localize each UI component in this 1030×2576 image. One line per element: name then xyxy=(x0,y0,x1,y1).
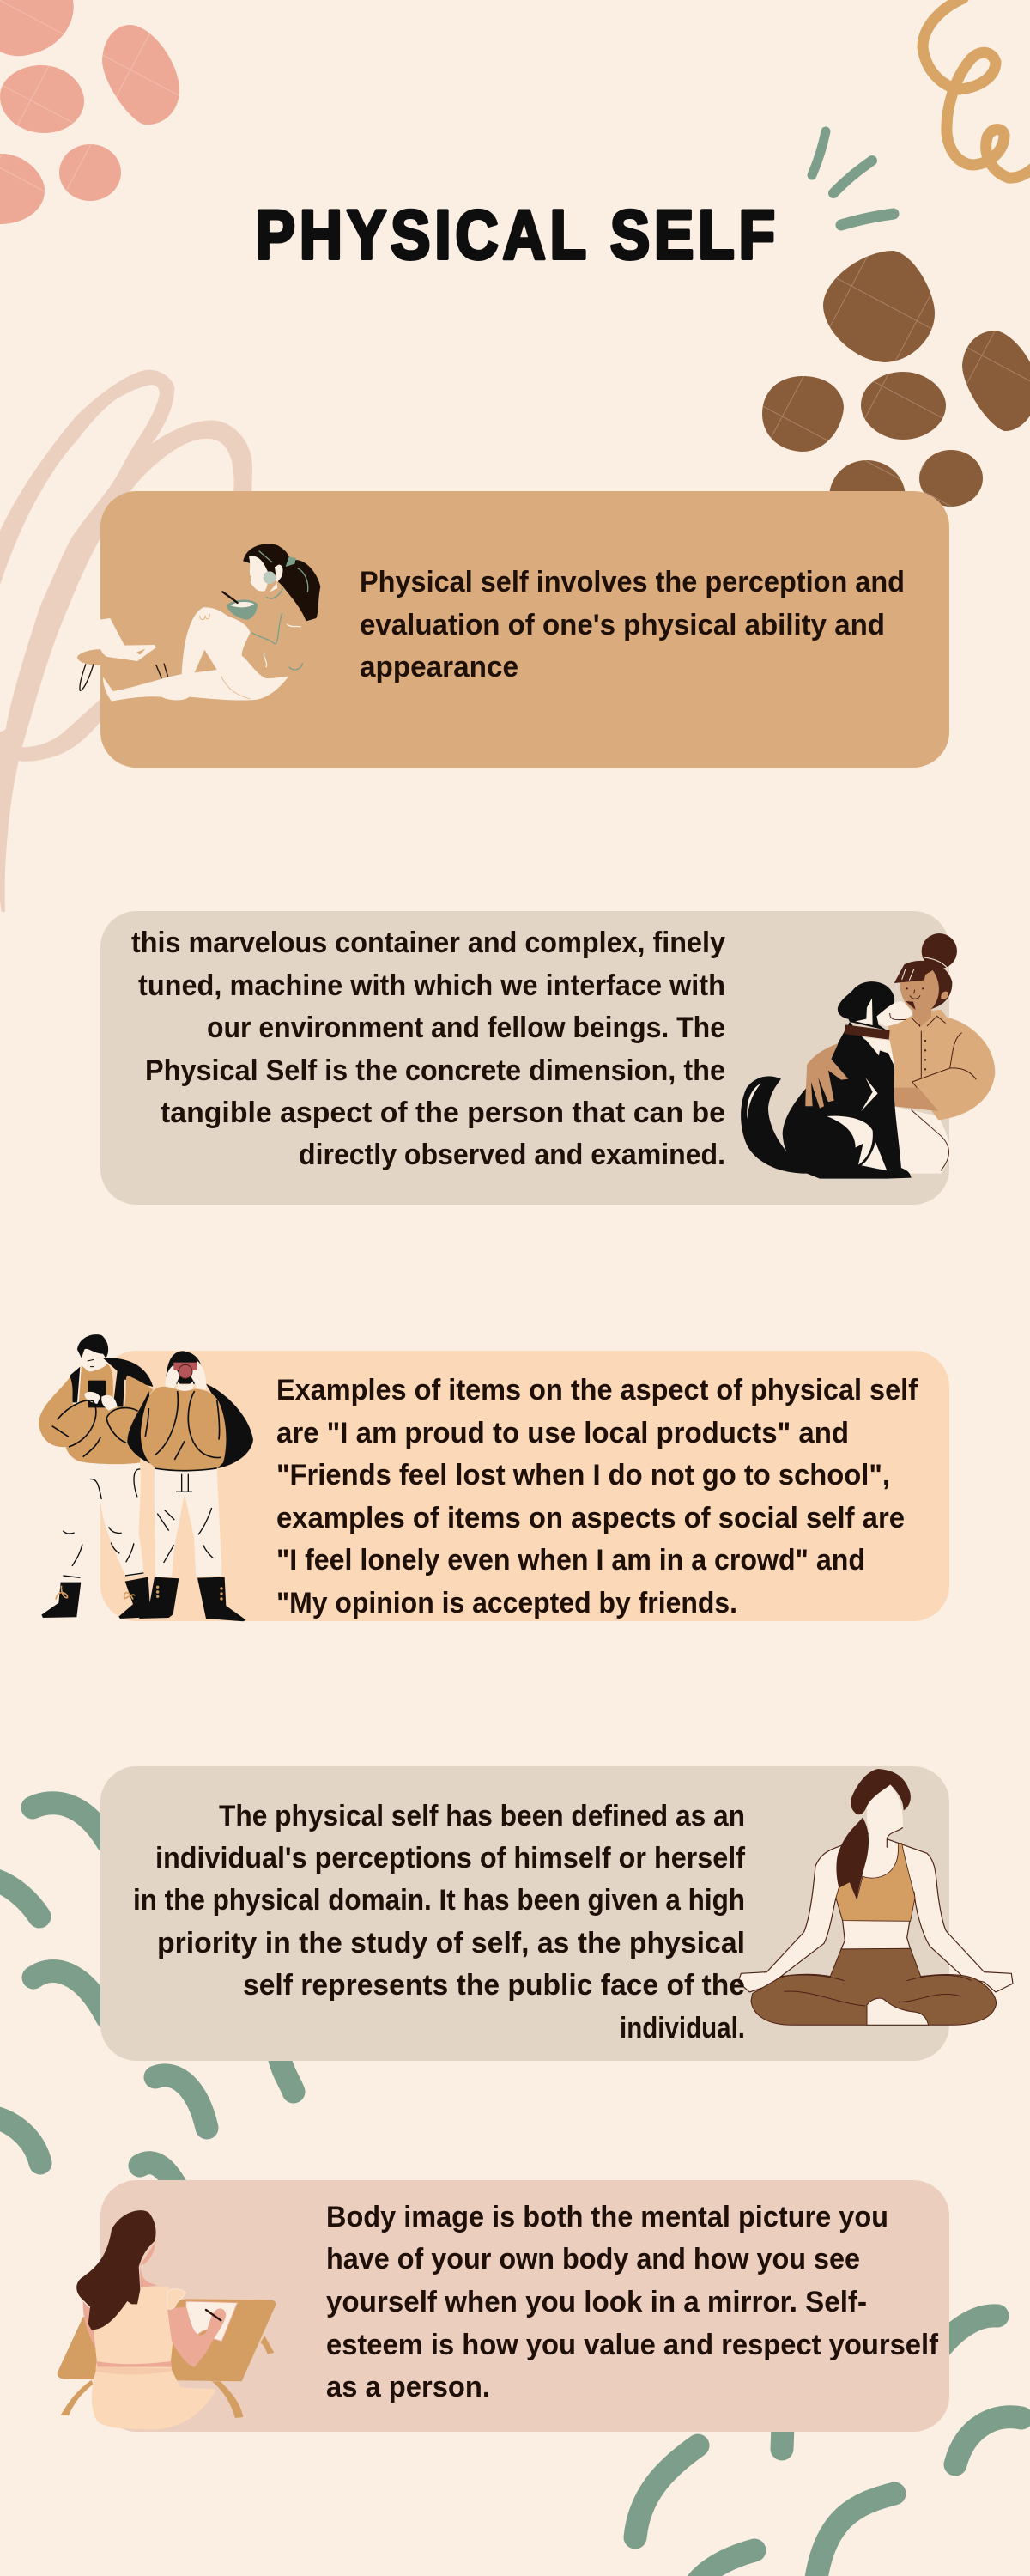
card background xyxy=(100,1766,949,2061)
body text: Examples of items on the aspect of physical self xyxy=(276,1374,918,1406)
title: PHYSICAL SELF xyxy=(256,197,775,274)
body text xyxy=(276,1374,918,1619)
decoration: orange curl xyxy=(923,0,1030,178)
body text: "Friends feel lost when I do not go to school", xyxy=(276,1459,890,1492)
body text: examples of items on aspects of social self are xyxy=(276,1502,905,1534)
body text: as a person. xyxy=(326,2371,490,2403)
panel: body image xyxy=(58,2180,949,2432)
body text: in the physical domain. It has been given a high xyxy=(133,1884,745,1917)
body text: individual. xyxy=(620,2012,745,2044)
body text: esteem is how you value and respect yourself xyxy=(326,2329,939,2361)
decoration: green ticks xyxy=(812,131,894,225)
body text: Physical Self is the concrete dimension, the xyxy=(145,1054,725,1087)
illustration: woman hugging dog xyxy=(741,933,995,1179)
card background xyxy=(100,2180,949,2432)
body text: have of your own body and how you see xyxy=(326,2243,860,2275)
body text: evaluation of one's physical ability and xyxy=(360,609,885,641)
panel: perceptions xyxy=(100,1766,1013,2061)
illustration: woman writing at desk xyxy=(58,2210,276,2429)
body text xyxy=(131,927,725,1171)
body text: our environment and fellow beings. The xyxy=(207,1012,725,1044)
body text: priority in the study of self, as the physical xyxy=(157,1927,745,1959)
panel: concrete dimension xyxy=(100,911,995,1205)
body text: Body image is both the mental picture you xyxy=(326,2201,888,2233)
body text xyxy=(133,1800,746,2044)
decoration: pink swirl xyxy=(0,370,252,912)
decoration: brown blobs xyxy=(762,251,1030,507)
body text: individual's perceptions of himself or herself xyxy=(155,1842,746,1874)
body text: this marvelous container and complex, finely xyxy=(131,927,725,959)
body text xyxy=(326,2201,939,2403)
body text: The physical self has been defined as an xyxy=(219,1800,745,1832)
illustration: woman eating with laptop xyxy=(77,544,320,702)
body text: yourself when you look in a mirror. Self- xyxy=(326,2286,867,2318)
card background xyxy=(100,911,949,1205)
body text: Physical self involves the perception and xyxy=(360,566,905,598)
decoration: pink blobs xyxy=(0,0,179,224)
illustration: two students xyxy=(39,1334,253,1621)
illustration: meditating woman xyxy=(738,1769,1013,2025)
body text: tangible aspect of the person that can be xyxy=(161,1097,725,1129)
body text: appearance xyxy=(360,651,518,683)
body text: "My opinion is accepted by friends. xyxy=(276,1587,737,1619)
card background xyxy=(100,491,949,768)
panel: examples xyxy=(39,1334,949,1621)
body text: self represents the public face of the xyxy=(243,1969,745,2002)
decoration: green squiggles xyxy=(0,1803,1021,2576)
body text: tuned, machine with which we interface with xyxy=(138,969,725,1002)
card background xyxy=(100,1351,949,1621)
body text: directly observed and examined. xyxy=(299,1139,725,1171)
body text xyxy=(360,566,905,683)
body text: "I feel lonely even when I am in a crowd" and xyxy=(276,1544,865,1577)
panel: definition xyxy=(77,491,949,768)
body text: are "I am proud to use local products" and xyxy=(276,1417,849,1449)
